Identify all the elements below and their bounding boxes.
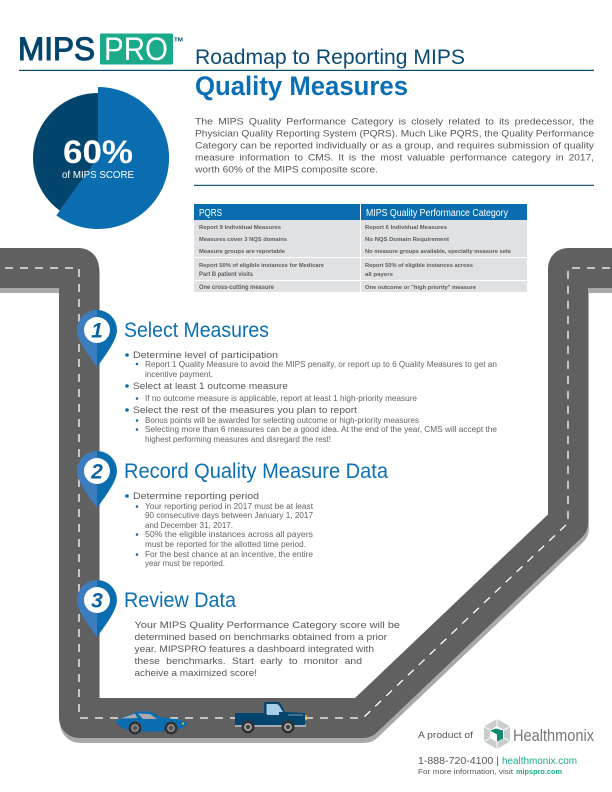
section 2 bullets: year must be reported. <box>145 559 225 568</box>
header rule <box>19 70 594 71</box>
text: A product of: A product of <box>418 730 473 741</box>
comparison table <box>194 204 527 292</box>
section 1 bullets: highest performing measures and disregard the rest! <box>145 435 331 444</box>
pie chart: 60% of MIPS score: of MIPS SCORE <box>62 169 134 181</box>
pie chart: 60% of MIPS score <box>33 87 169 229</box>
section 3 paragraph: acheive a maximized score! <box>134 667 257 678</box>
comparison table: all payers <box>365 272 393 278</box>
section 1 bullets: Bonus points will be awarded for selecting outcome or high-priority measures <box>145 416 419 425</box>
comparison table: MIPS Quality Performance Category <box>366 208 508 219</box>
intro paragraph: worth 60% of the MIPS composite score. <box>194 164 378 175</box>
pie chart: 60% of MIPS score: 60% <box>63 134 133 170</box>
section 2 bullets: Determine reporting period <box>133 491 259 502</box>
comparison table: One cross-cutting measure <box>199 284 275 291</box>
section 2 bullets: and December 31, 2017. <box>145 521 233 530</box>
comparison table: Report 50% of eligible instances for Medicare <box>199 263 324 269</box>
comparison table: No NQS Domain Requirement <box>365 237 449 243</box>
intro paragraph: Physician Quality Reporting System (PQRS). Much Like PQRS, the Quality Performance <box>195 128 594 139</box>
comparison table: Part B patient visits <box>199 271 254 278</box>
intro paragraph: The MIPS Quality Performance Category is closely related to its predecessor, the <box>195 116 594 127</box>
title: Roadmap to Reporting MIPS: Roadmap to Reporting MIPS <box>195 46 465 69</box>
section 1 bullets: Select the rest of the measures you plan to report <box>133 405 357 416</box>
intro paragraph <box>194 116 594 175</box>
section 3 paragraph: year. MIPSPRO features a dashboard integrated with <box>134 643 374 654</box>
intro paragraph: Category can be reported individually or as a group, and requires submission of quality <box>195 140 594 151</box>
icon: pin 3: 3 <box>91 590 103 612</box>
section rule <box>194 185 594 186</box>
section 1 bullets: Determine level of participation <box>133 350 278 361</box>
icon: blue sports car <box>115 711 188 734</box>
comparison table: PQRS <box>199 208 222 219</box>
comparison table: Report 50% of eligible instances across <box>365 263 473 269</box>
section 1 bullets <box>125 350 497 444</box>
comparison table: One outcome or "high priority" measure <box>365 285 476 291</box>
comparison table: Measure groups are reportable <box>199 249 285 255</box>
section 1 bullets: incentive payment. <box>145 370 213 379</box>
section 2 bullets <box>125 491 314 568</box>
section 1 heading: Select Measures: Select Measures <box>124 318 269 342</box>
section 3 paragraph: these benchmarks. Start early to monitor and <box>134 655 362 666</box>
heading: Quality Measures: Quality Measures <box>195 71 408 101</box>
icon: pin 2: 2 <box>90 460 103 484</box>
logo: Healthmonix: Healthmonix <box>513 726 594 745</box>
section 3 paragraph: determined based on benchmarks obtained from a prior <box>134 631 387 642</box>
section 1 bullets: Report 1 Quality Measure to avoid the MIPS penalty, or report up to 6 Quality Measures to get an <box>145 360 497 369</box>
intro paragraph: measure information to CMS. It is the most valuable performance category in 2017, <box>195 152 594 163</box>
comparison table: Report 9 Individual Measures <box>199 225 281 231</box>
section 3 paragraph <box>134 619 400 678</box>
section 2 bullets: 90 consecutive days between January 1, 2017 <box>145 511 313 520</box>
comparison table: Measures cover 3 NQS domains <box>199 237 287 243</box>
section 1 bullets: If no outcome measure is applicable, report at least 1 high-priority measure <box>145 394 417 403</box>
icon: pin 2 <box>77 451 117 508</box>
contact: more information: mipspro.com <box>516 767 562 776</box>
comparison table: No measure groups available, specialty measure sets <box>365 249 511 255</box>
icon: pin 1: 1 <box>91 320 103 342</box>
logo: MIPSPRO: PRO <box>104 31 168 67</box>
icon: pin 3 <box>77 580 117 637</box>
section 2 bullets: For the best chance at an incentive, the entire <box>145 550 313 559</box>
section 2 bullets: 50% the eligible instances across all payers <box>145 530 313 539</box>
logo: MIPSPRO: MIPS <box>18 31 95 67</box>
comparison table: Report 6 Individual Measures <box>365 225 447 231</box>
contact: more information <box>418 767 562 776</box>
section 1 bullets: Select at least 1 outcome measure <box>133 381 288 392</box>
contact: more information: For more information, visit <box>418 767 514 776</box>
icon: pin 1 <box>77 310 117 367</box>
section 3 heading: Review Data: Review Data <box>124 588 236 612</box>
section 2 heading: Record Quality Measure Data: Record Quality Measure Data <box>124 459 388 483</box>
contact: phone and website: healthmonix.com <box>502 756 577 767</box>
logo: Healthmonix <box>484 719 594 749</box>
section 1 bullets: Selecting more than 6 measures can be a good idea. At the end of the year, CMS will accept the <box>145 425 497 434</box>
section 3 paragraph: Your MIPS Quality Performance Category score will be <box>134 619 400 630</box>
section 2 bullets: Your reporting period in 2017 must be at least <box>145 502 314 511</box>
icon: navy pickup truck <box>235 702 307 734</box>
logo: MIPSPRO <box>18 31 183 67</box>
section 2 bullets: must be reported for the allotted time period. <box>145 540 306 549</box>
contact: phone and website <box>418 756 577 767</box>
logo: MIPSPRO: TM <box>174 38 183 44</box>
contact: phone and website: 1-888-720-4100 | <box>418 756 499 767</box>
road <box>0 268 612 723</box>
